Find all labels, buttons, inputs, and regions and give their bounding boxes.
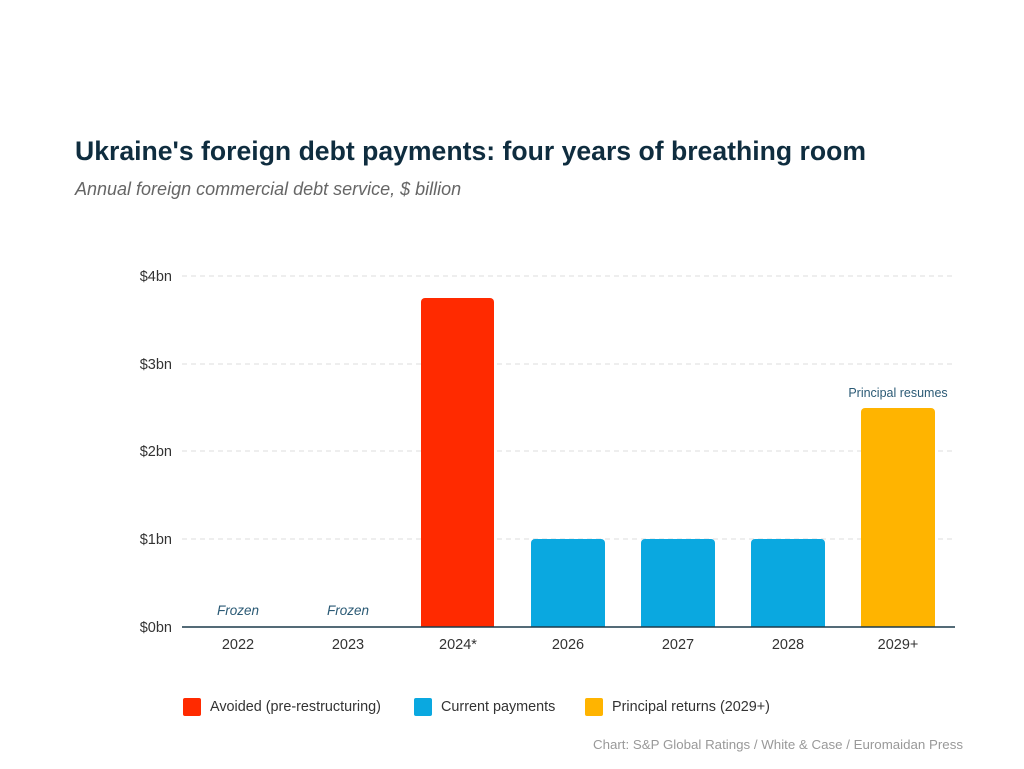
legend: Avoided (pre-restructuring) — [210, 699, 381, 715]
x axis labels: 2024* — [439, 637, 477, 653]
x axis labels — [222, 637, 918, 653]
source: Chart: S&P Global Ratings / White & Case / Euromaidan Press — [593, 737, 963, 752]
legend — [183, 698, 770, 716]
annotations: Frozen — [327, 603, 369, 618]
y axis labels: $3bn — [140, 357, 172, 373]
x axis labels: 2027 — [662, 637, 694, 653]
y axis labels: $2bn — [140, 444, 172, 460]
annotations: Principal resumes — [848, 386, 948, 400]
bars — [421, 298, 935, 627]
y axis labels: $1bn — [140, 532, 172, 548]
x axis labels: 2023 — [332, 637, 364, 653]
y axis labels: $0bn — [140, 620, 172, 636]
annotations — [217, 386, 948, 618]
title: Ukraine's foreign debt payments: four years of breathing room — [75, 136, 866, 166]
y axis labels — [140, 269, 172, 636]
x axis labels: 2028 — [772, 637, 804, 653]
legend: Current payments — [441, 699, 555, 715]
x axis labels: 2026 — [552, 637, 584, 653]
x axis labels: 2022 — [222, 637, 254, 653]
x axis labels: 2029+ — [878, 637, 918, 653]
annotations: Frozen — [217, 603, 259, 618]
y axis labels: $4bn — [140, 269, 172, 285]
subtitle: Annual foreign commercial debt service, $ billion — [75, 179, 461, 199]
legend: Principal returns (2029+) — [612, 699, 770, 715]
